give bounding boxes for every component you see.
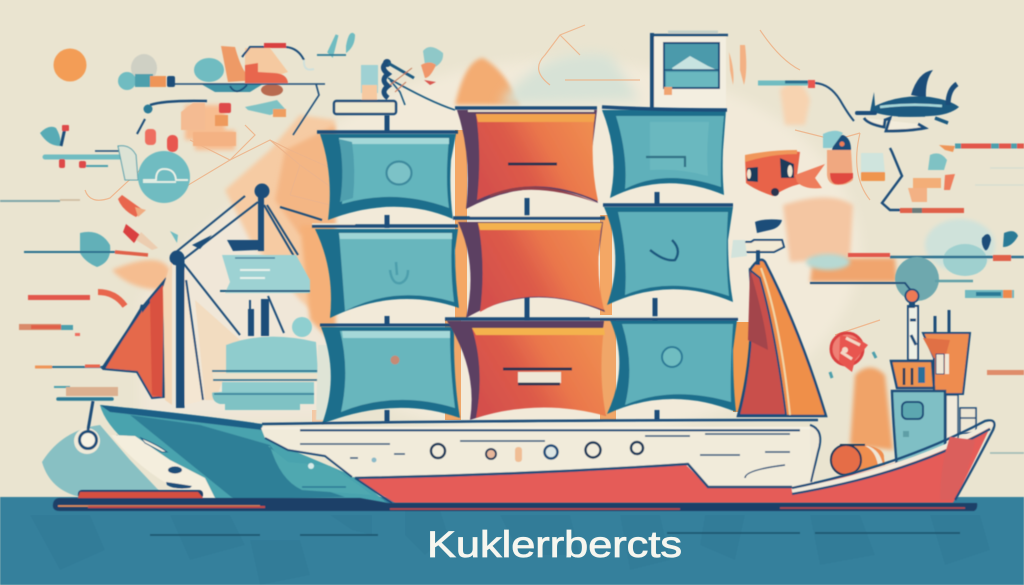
teal bow (100, 405, 395, 510)
icon: anchor ring (80, 401, 96, 448)
icon: cup (861, 153, 885, 181)
red jib sail (104, 280, 165, 398)
sail B (312, 224, 459, 318)
teal sails column (312, 107, 737, 424)
barrel (831, 445, 885, 475)
colored dashes: left side (19, 292, 125, 399)
icon cluster: left circle badge and markers (0, 125, 190, 267)
icon cluster: top left clouds and connectors (118, 34, 354, 146)
tower mast (906, 290, 949, 360)
icon cluster: shark and top-right dashes (758, 70, 1024, 453)
ship stern tower (831, 290, 976, 475)
right red sail with crossbar (731, 219, 826, 416)
rear cabin (923, 333, 970, 394)
crane rigging with lantern (334, 47, 455, 114)
icon: potion bottle (823, 131, 853, 185)
teal lower sail stack (226, 337, 318, 373)
cream deck (261, 428, 820, 490)
sail F (445, 317, 738, 420)
sail G (602, 107, 727, 198)
anchor blob (42, 425, 165, 497)
sail A (317, 132, 458, 220)
sun: orange circle (54, 48, 86, 82)
sail D (455, 108, 598, 209)
ship hull (42, 401, 994, 510)
red hull (355, 423, 992, 503)
fore mast and rigging (258, 195, 264, 251)
sea band (0, 497, 1024, 585)
deck base bar (53, 490, 977, 511)
teal cab (892, 391, 945, 468)
masts between sails (387, 115, 657, 422)
red sails column (445, 108, 738, 420)
icon: ship wheel (830, 333, 876, 378)
icon: shark (857, 70, 959, 131)
sign board (334, 101, 396, 114)
portholes (372, 442, 643, 462)
faint patches in sea (30, 510, 990, 585)
background wash: pale and orange blobs behind ship (112, 54, 995, 450)
left rigging and masts (102, 184, 338, 420)
sail C (320, 325, 460, 424)
orange cab (891, 361, 934, 388)
teal upper sail stack (222, 255, 310, 293)
thin map-like lines (85, 25, 880, 335)
sail E (453, 216, 605, 318)
flag with screen (650, 32, 746, 109)
icon: orange fish (745, 131, 885, 196)
sail I (607, 320, 737, 414)
title: wordmark: Kuklerrbercts (427, 524, 682, 565)
cream sail panels (163, 260, 172, 405)
main mast (176, 260, 184, 408)
sail H (603, 205, 733, 305)
